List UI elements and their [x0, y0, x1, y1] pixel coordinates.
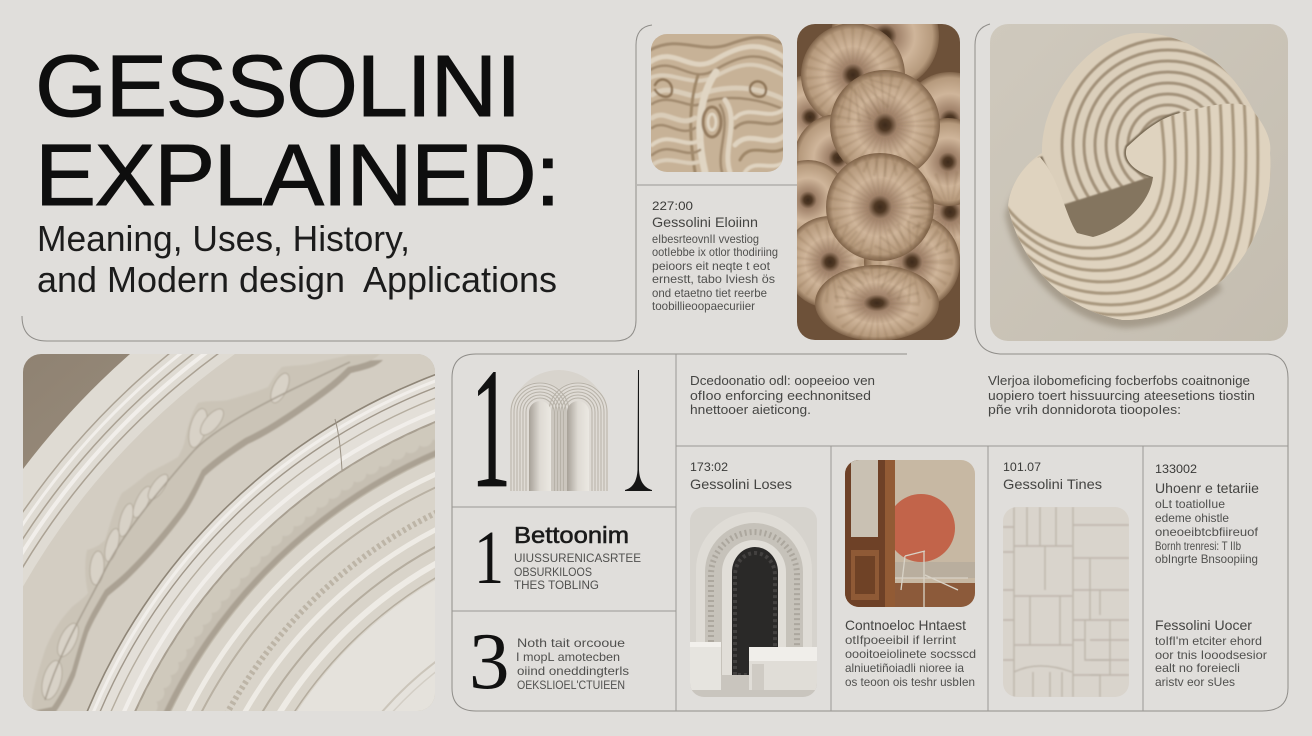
subtitle: and Modern design Applications	[37, 259, 557, 300]
title: Gessolini Explained: GESSOLINI	[35, 38, 520, 135]
title: Gessolini Explained	[35, 38, 559, 224]
item text: I mopL amotecben	[516, 650, 620, 664]
column heading: Gessolini Tines	[1003, 460, 1102, 492]
item text: oiind oneddingterls	[517, 664, 629, 678]
numeral 1: 1	[474, 516, 504, 600]
text block: Contnoeloc Hntaest: otIfpoeeibil if lerrint	[845, 633, 957, 647]
text block: Uhoenr e tetariie: Bornh trenresi: T IIb	[1155, 539, 1241, 553]
text block: Gessolini Eloiinn	[652, 199, 778, 313]
text block: Contnoeloc Hntaest	[845, 617, 976, 689]
icon: ribbed double arch with serif letters: 1	[471, 334, 511, 524]
list item: 3	[469, 616, 629, 706]
text block: Contnoeloc Hntaest: os teoon ois teshr usbIen	[845, 675, 975, 689]
text block: Uhoenr e tetariie: Uhoenr e tetariie	[1155, 480, 1259, 496]
panel outline: header frame	[22, 25, 652, 341]
text block: Contnoeloc Hntaest: alniuetiñoiadli nioree ia	[845, 661, 964, 675]
beaded garland	[142, 429, 445, 720]
image: modern interior with red disc	[845, 460, 975, 607]
intro paragraph: right: uopiero toert hissuurcing ateesetions tiostin	[988, 388, 1255, 403]
numeral 3: 3	[469, 616, 510, 706]
text block: Fessolini Uocer: Fessolini Uocer	[1155, 617, 1252, 633]
text block: Uhoenr e tetariie: oneoeibtcbfiireuof	[1155, 525, 1259, 539]
intro paragraph: right: Vlerjoa ilobomeficing focberfobs coaitnonige	[988, 373, 1250, 388]
column heading: Gessolini Loses	[690, 460, 792, 492]
image: ornate arched plaster moulding	[15, 345, 445, 720]
item text: Noth tait orcooue	[517, 636, 625, 650]
image: ornate arched doorway	[690, 507, 817, 697]
intro paragraph: left: ofIoo enforcing eechnonitsed	[690, 388, 871, 403]
column heading: Gessolini Loses: 173:02	[690, 460, 728, 474]
leaf ornament	[32, 354, 383, 717]
text block: Gessolini Eloiinn: 227:00	[652, 199, 693, 213]
image: ribbed plaster swirl	[990, 24, 1288, 341]
panel outline: image frame	[452, 24, 1288, 711]
text block: Contnoeloc Hntaest: oooitoeiolinete socsscd	[845, 647, 976, 661]
intro paragraph: left: Dcedoonatio odl: oopeeioo ven	[690, 373, 875, 388]
text block: Fessolini Uocer: ealt no foreiecli	[1155, 661, 1240, 675]
text block: Fessolini Uocer: toIfI'm etciter ehord	[1155, 634, 1262, 648]
text block: Uhoenr e tetariie: oLt toatiolIue	[1155, 497, 1225, 511]
text block: Fessolini Uocer: oor tnis Iooodsesior	[1155, 648, 1267, 662]
item text: THES TOBLING	[514, 578, 599, 592]
item text: UIUSSURENICASRTEE	[514, 551, 641, 565]
column heading: Gessolini Tines: Gessolini Tines	[1003, 476, 1102, 492]
rosette cluster	[797, 24, 960, 340]
image: swirled plaster texture	[650, 34, 785, 172]
intro paragraph: left	[690, 373, 875, 417]
text block: Fessolini Uocer	[1155, 617, 1267, 689]
image: radial plaster rosettes	[797, 24, 960, 340]
text block: Contnoeloc Hntaest: Contnoeloc Hntaest	[845, 617, 966, 633]
title block	[35, 38, 559, 300]
subtitle: Meaning, Uses, History,	[37, 218, 410, 259]
item text	[514, 551, 641, 592]
text block: Fessolini Uocer: aristv eor sUes	[1155, 675, 1235, 689]
item text	[516, 636, 629, 692]
text block: Gessolini Eloiinn: peioors eit neqte t eot	[652, 259, 771, 273]
column heading: Gessolini Tines: 101.07	[1003, 460, 1041, 474]
title: Gessolini Explained: EXPLAINED:	[35, 127, 559, 224]
icon: ribbed double arch with serif letters	[471, 334, 652, 524]
intro paragraph: right	[988, 373, 1255, 417]
item heading: Bettoonim	[514, 522, 629, 548]
list item: 1 Bettoonim	[474, 516, 641, 600]
text block: Gessolini Eloiinn: ootIebbe ix otlor thodiriing	[652, 245, 778, 259]
text block: Gessolini Eloiinn: ond etaetno tiet reerbe	[652, 286, 767, 300]
column heading: Gessolini Loses: Gessolini Loses	[690, 476, 792, 492]
item text: OBSURKILOOS	[514, 565, 592, 579]
intro paragraph: left: hnettooer aieticong.	[690, 402, 811, 417]
intro paragraph: right: pñe vrih donnidorota tioopoIes:	[988, 402, 1181, 417]
text block: Gessolini Eloiinn: ernestt, tabo Iviesh ös	[652, 272, 775, 286]
text block: Uhoenr e tetariie: obIngrte Bnsoopiing	[1155, 552, 1258, 566]
text block: Uhoenr e tetariie: edeme ohistle	[1155, 511, 1229, 525]
text block: Gessolini Eloiinn: eIbesrteovnII vvestiog	[652, 232, 759, 246]
text block: Gessolini Eloiinn: Gessolini Eloiinn	[652, 214, 758, 230]
text block: Gessolini Eloiinn: toobillieoopaecuriier	[652, 299, 755, 313]
image: relief wall tiles	[1003, 507, 1129, 697]
item text: OEKSLIOEL'CTUIEEN	[517, 678, 625, 692]
stem glyph	[625, 370, 652, 491]
subtitle	[37, 218, 557, 300]
text block: Uhoenr e tetariie: 133002	[1155, 462, 1197, 476]
moulding bands	[15, 345, 445, 720]
double arch relief	[510, 370, 608, 491]
text block: Uhoenr e tetariie	[1155, 462, 1259, 566]
